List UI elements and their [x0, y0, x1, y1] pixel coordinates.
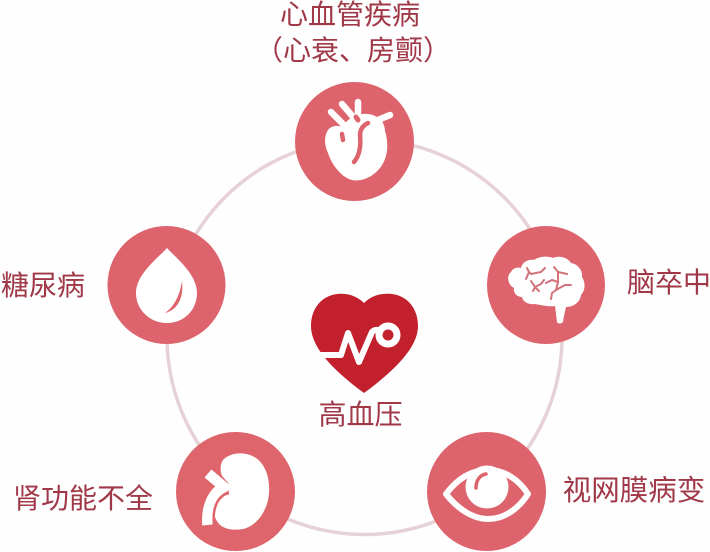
icon: brain — [508, 257, 585, 324]
node: diabetes — [108, 226, 226, 344]
label: heart failure and atrial fibrillation: （心衰、房颤） — [255, 35, 451, 66]
icon: blood drop — [136, 248, 197, 323]
label: stroke: 脑卒中 — [627, 267, 710, 298]
icon: eye — [446, 466, 528, 519]
node: cardiovascular disease — [295, 82, 414, 201]
icon: central heart with pulse — [311, 294, 418, 393]
node: renal insufficiency — [176, 432, 295, 551]
icon: kidney — [207, 453, 269, 530]
label: diabetes: 糖尿病 — [1, 270, 85, 301]
center label: 高血压 — [318, 399, 403, 430]
node: stroke — [487, 226, 605, 344]
label: renal insufficiency: 肾功能不全 — [13, 483, 153, 514]
icon: heart organ — [325, 102, 390, 180]
label: retinopathy: 视网膜病变 — [563, 475, 705, 507]
node: retinopathy — [427, 432, 546, 551]
